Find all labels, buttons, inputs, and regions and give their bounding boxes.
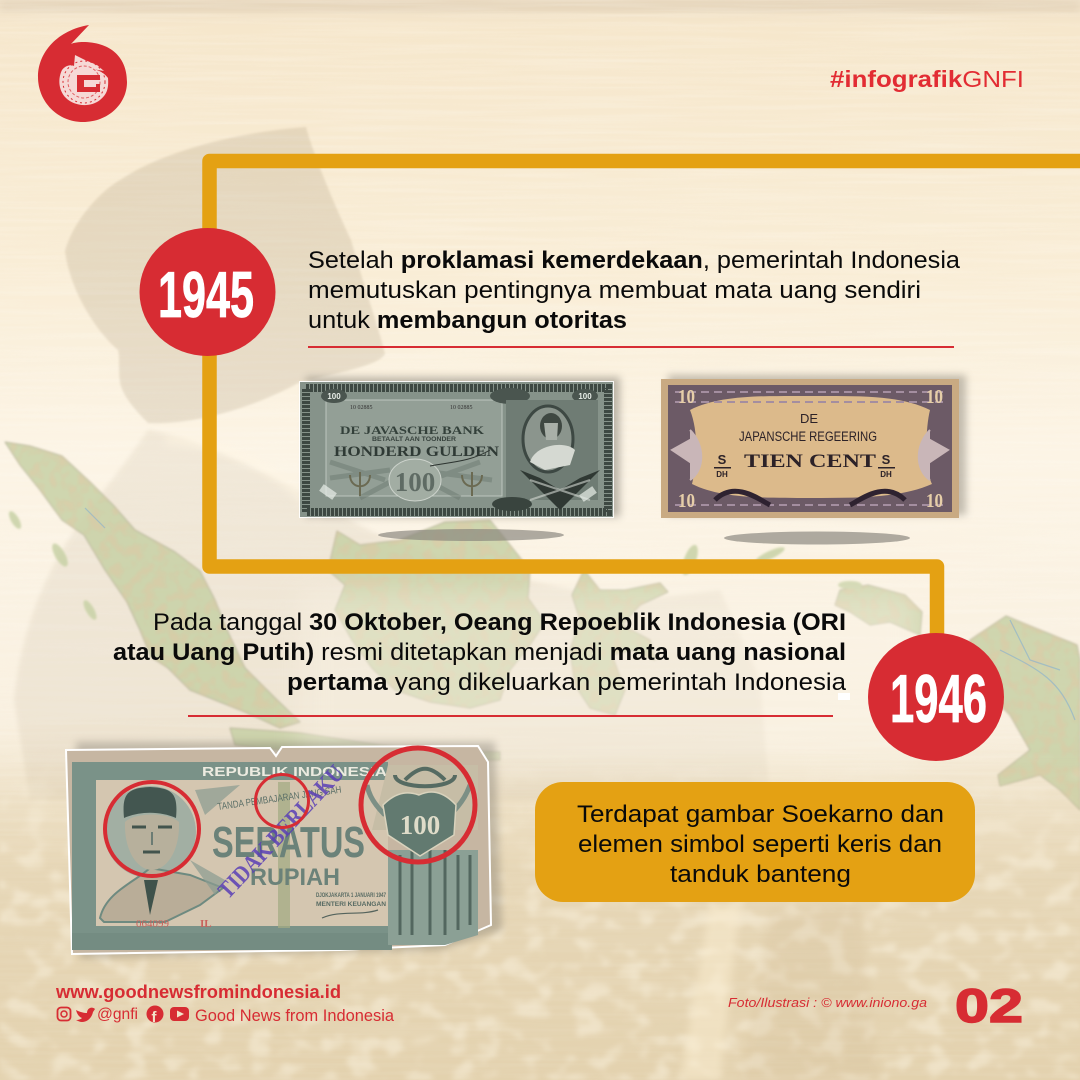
banknote: De Javasche Bank 100 gulden: 10 02885 [450, 405, 472, 411]
callout: symbols on the banknote [535, 782, 975, 902]
callout: symbols on the banknote: Terdapat gambar Soekarno dan [577, 801, 944, 828]
banknote: De Japansche Regeering tien cent [661, 375, 966, 518]
year badge 1946: 1946 [890, 661, 987, 737]
banknote: De Japansche Regeering tien cent: 10 [678, 386, 695, 408]
banknote: Oeang Republik Indonesia seratus rupiah [66, 742, 502, 958]
banknote: De Japansche Regeering tien cent: TIEN CENT [744, 451, 876, 472]
banknote: Oeang Republik Indonesia seratus rupiah: SERATUS [212, 818, 365, 867]
callout: symbols on the banknote: tanduk banteng [670, 861, 851, 888]
year badge 1945 [140, 228, 276, 356]
text block: 1946: atau Uang Putih) resmi ditetapkan menjadi mata uang nasional [113, 639, 846, 666]
text block: 1946 [113, 609, 846, 696]
banknote: Oeang Republik Indonesia seratus rupiah: REPUBLIK INDONESIA [202, 765, 387, 779]
banknote: Oeang Republik Indonesia seratus rupiah: TIDAK BERLAKU [213, 761, 350, 904]
banknote: De Javasche Bank 100 gulden: 10 02885 [350, 405, 372, 411]
banknote: De Japansche Regeering tien cent: S [882, 452, 891, 467]
banknote: Oeang Republik Indonesia seratus rupiah: TANDA PEMBAJARAN JANG SAH [217, 785, 342, 813]
banknote: De Japansche Regeering tien cent: JAPANSCHE REGEERING [739, 429, 877, 444]
banknote: De Japansche Regeering tien cent: S [718, 452, 727, 467]
banknote: De Javasche Bank 100 gulden: HONDERD GULDEN [334, 444, 499, 460]
text block: 1945: memutuskan pentingnya membuat mata uang sendiri [308, 277, 921, 304]
year badge 1946 [838, 633, 1004, 761]
callout: symbols on the banknote: elemen simbol seperti keris dan [578, 831, 942, 858]
banknote: De Japansche Regeering tien cent: 10 [926, 490, 943, 512]
logo [38, 25, 127, 122]
banknote: Oeang Republik Indonesia seratus rupiah: RUPIAH [250, 864, 340, 891]
banknote: Oeang Republik Indonesia seratus rupiah: IL [200, 918, 212, 930]
banknote: De Javasche Bank 100 gulden: 100 [327, 392, 341, 401]
text block: 1946: pertama yang dikeluarkan pemerintah Indonesia [287, 669, 846, 696]
shadow ellipses under banknotes [378, 529, 910, 544]
footer: website and social handles: www.goodnewsfromindonesia.id [55, 981, 341, 1002]
footer: website and social handles: @gnfi [97, 1006, 138, 1023]
text block: 1946: Pada tanggal 30 Oktober, Oeang Repoeblik Indonesia (ORI [153, 609, 846, 636]
banknote: De Javasche Bank 100 gulden: 100 [578, 392, 592, 401]
footer: website and social handles: Good News from Indonesia [195, 1007, 395, 1025]
banknote: De Japansche Regeering tien cent: DH [880, 470, 892, 479]
page number: 02 [955, 979, 1023, 1032]
year badge 1945: 1945 [158, 258, 254, 331]
text block: 1945 [308, 247, 960, 334]
banknote: De Japansche Regeering tien cent: DE [800, 411, 818, 426]
footer: website and social handles: f [152, 1009, 158, 1026]
banknote: De Javasche Bank 100 gulden: BETAALT AAN TOONDER [372, 437, 457, 443]
text block: 1945: untuk membangun otoritas [308, 307, 627, 334]
hashtag heading: #infografik GNFI [830, 66, 1024, 92]
banknote: Oeang Republik Indonesia seratus rupiah: 064099 [136, 918, 170, 930]
banknote: De Javasche Bank 100 gulden: DE JAVASCHE BANK [340, 425, 484, 437]
footer: website and social handles [55, 981, 395, 1026]
banknote: De Javasche Bank 100 gulden: 100 [395, 467, 435, 497]
banknote: Oeang Republik Indonesia seratus rupiah: DJOKJAKARTA 1 JANUARI 1947 [316, 893, 386, 899]
text block: 1945: Setelah proklamasi kemerdekaan , pemerintah Indonesia [308, 247, 960, 274]
banknote: Oeang Republik Indonesia seratus rupiah: MENTERI KEUANGAN [316, 901, 386, 908]
banknote: De Javasche Bank 100 gulden [299, 377, 620, 518]
banknote: De Japansche Regeering tien cent: 10 [678, 490, 695, 512]
banknote: De Japansche Regeering tien cent: 10 [926, 386, 943, 408]
banknote: Oeang Republik Indonesia seratus rupiah: 100 [400, 810, 440, 840]
banknote: De Japansche Regeering tien cent: DH [716, 470, 728, 479]
orange timeline frame [210, 161, 1080, 650]
photo credit: Foto/Ilustrasi : © www.iniono.ga [728, 996, 927, 1010]
